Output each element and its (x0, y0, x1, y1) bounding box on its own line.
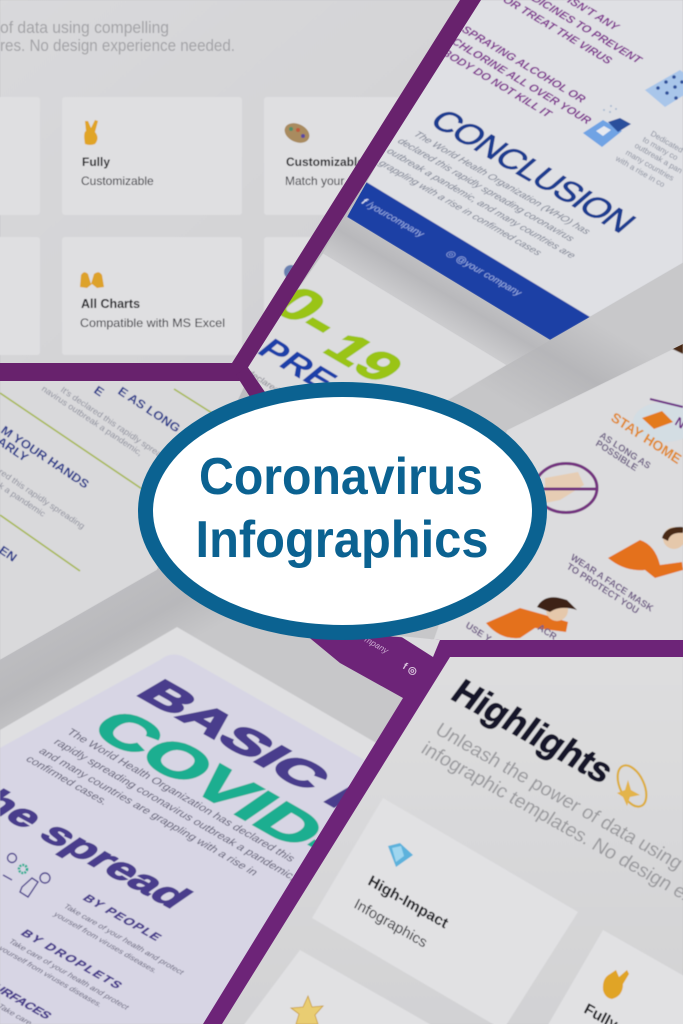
white wedge (400, 636, 440, 657)
heading: conclusion: CONCLUSION (422, 104, 643, 239)
subtitle fragment: res. No design experience needed. (0, 37, 235, 55)
warning text: spraying: CHLORINE ALL OVER YOUR (449, 36, 594, 127)
card: fully (545, 930, 683, 1024)
icon: no touch hand (535, 464, 597, 512)
card title: High-Impact (365, 873, 451, 932)
card text: Match your (285, 174, 344, 188)
subheading: by droplets: BY DROPLETS (18, 928, 125, 991)
footer social icons: f ◎ (400, 661, 419, 678)
poster: conclusion (347, 0, 683, 340)
card: all charts (62, 237, 242, 355)
side paragraph (613, 129, 683, 189)
side paragraph: to many co (641, 135, 680, 163)
icon: people spread (3, 854, 50, 897)
panel: highlights (210, 650, 683, 1024)
paragraph: and many countries are grappling with a rise in (36, 746, 260, 878)
card: high-impact (312, 798, 578, 1024)
paragraph: rapidly spreading coronavirus outbreak a pandemic, (51, 737, 299, 882)
side paragraph: outbreak a pan (633, 141, 683, 175)
icon: shooting star (612, 761, 652, 811)
warning text: spraying: BODY DO NOT KILL IT (439, 47, 554, 121)
icon: pills (645, 70, 683, 107)
icon: palette (284, 122, 310, 144)
paragraph: confirmed cases. (23, 754, 110, 807)
text: as long as possible: AS LONG AS (597, 430, 652, 472)
card: right bottom (264, 238, 310, 311)
icon: star (291, 996, 323, 1024)
card text: Customizable (81, 174, 154, 188)
shadow behind conclusion poster (323, 215, 590, 365)
paragraph: conclusion: The World Health Organization (WHO) has (411, 130, 592, 237)
heading: stay home: STAY HOME (608, 409, 683, 467)
heading: 0-19: - (283, 297, 361, 348)
shadow right of prevention poster (447, 263, 683, 445)
card: left bottom (0, 237, 40, 355)
list headings: E (91, 384, 107, 399)
card text: Infographics (351, 896, 429, 951)
footer text: instagram: ◎ @your company (443, 248, 524, 299)
text: wear a face mask: WEAR A FACE MASK (568, 552, 655, 615)
footer text fragment: mpany (363, 634, 391, 656)
text: use: USE Y (463, 620, 493, 646)
pale backdrop (633, 402, 683, 442)
warning text: spraying: SPRAYING ALCOHOL OR (459, 24, 588, 106)
heading: highlights: Highlights (444, 672, 622, 791)
list headings: E AS LONG (115, 385, 183, 435)
footer band (347, 180, 590, 340)
poster: basic covid (0, 627, 435, 1024)
poster: prevention list (0, 375, 250, 660)
purple frame: top (0, 0, 481, 400)
heading: 0-19 (280, 288, 401, 380)
small text: droplets: Take care of your health and protect (7, 938, 132, 1011)
icon: spray bottle (583, 105, 631, 147)
lilac card (0, 654, 368, 1024)
divider lines (0, 389, 212, 571)
side paragraph: many countries (624, 148, 676, 183)
title ellipse (146, 390, 540, 632)
card text: Compatible with MS Excel (80, 316, 225, 330)
card title: Fully (82, 155, 110, 169)
heading: 0-19: 1 (312, 325, 387, 374)
heading fragment: of data using compelling (0, 19, 169, 37)
paragraph: conclusion: declared this rapidly spreading coronavirus (395, 137, 576, 244)
card: star (240, 950, 440, 1024)
icon: door (642, 411, 673, 429)
card title: Customizable (286, 155, 364, 169)
list small text: navirus outbreak a pandemic, (40, 384, 145, 458)
heading: prevention: PREA (252, 331, 365, 413)
heading: 0-19: 0 (257, 278, 340, 332)
paragraph: conclusion: grappling with a rise in confirmed cases (376, 159, 544, 258)
purple line (650, 399, 683, 407)
subheading: by people: BY PEOPLE (80, 893, 164, 943)
heading: basic: BASIC IN (126, 673, 413, 836)
purple frame: lower wedge (203, 630, 683, 1024)
list small text: It's declared this rapidly spreading (59, 385, 179, 469)
icon: diamond (388, 843, 413, 867)
title line 2: Infographics (196, 511, 488, 569)
icon: person with mask (608, 527, 683, 578)
icon: partial globe (284, 264, 294, 278)
heading: covid: COVID-19 (77, 701, 435, 912)
poster: covid-19 prevention (248, 254, 506, 400)
panel: top-left highlights (0, 0, 470, 372)
card title: All Charts (81, 297, 140, 311)
side paragraph: with a rise in co (613, 154, 667, 189)
list headings: M YOUR HANDS (0, 424, 92, 491)
small text: people: Take care of your health and protect (62, 903, 187, 976)
text: across: ACR (535, 622, 558, 643)
small text: declared (246, 368, 282, 394)
icon: victory hand (84, 120, 98, 145)
paragraph: conclusion: outbreak a pandemic, and many countries are (384, 147, 578, 261)
list headings (0, 384, 183, 564)
footer text: facebook: f /yourcompany (359, 197, 427, 240)
list small text (0, 386, 160, 530)
brown corner (660, 329, 683, 354)
title line 1: Coronavirus (199, 448, 483, 506)
small text: people: yourself from viruses diseases. (52, 911, 160, 975)
card: left top (0, 97, 40, 215)
card: customizable (264, 98, 398, 214)
text: as long as possible: POSSIBLE (593, 438, 639, 474)
icon: victory hand (603, 970, 629, 999)
heading: 0-19: 9 (341, 342, 416, 390)
paragraph: The World Health Organization has declared this (64, 727, 297, 864)
icon: person coughing (486, 597, 577, 638)
poster: mid right (430, 329, 683, 650)
text: wear a face mask: TO PROTECT YOU (564, 561, 641, 617)
icon: raised hands (80, 272, 104, 288)
card: fully customizable (62, 97, 242, 215)
